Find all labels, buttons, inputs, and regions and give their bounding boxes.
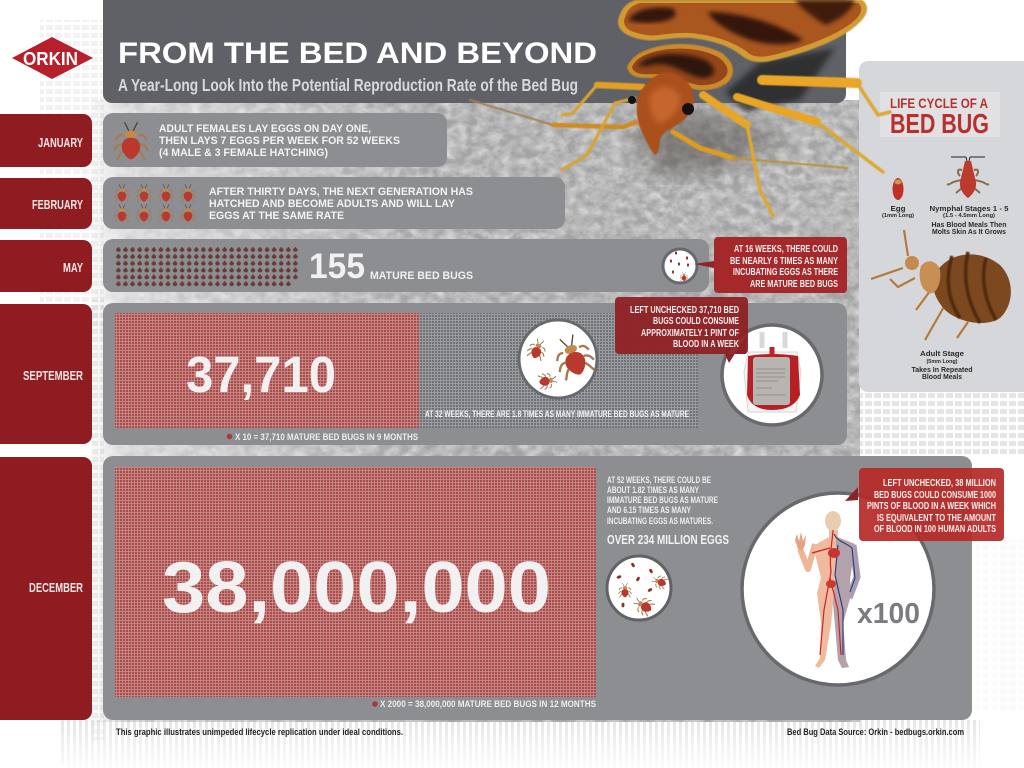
- text block: 52 weeks: IMMATURE BED BUGS AS MATURE: [607, 495, 718, 506]
- human figure: [795, 511, 857, 668]
- bug legs: [470, 80, 890, 216]
- callout: 37,710 blood: LEFT UNCHECKED 37,710 BED: [630, 305, 739, 316]
- title: FROM THE BED AND BEYOND: [118, 37, 597, 70]
- callout: 16 weeks: ARE MATURE BED BUGS: [750, 279, 838, 290]
- panel: February: HATCHED AND BECOME ADULTS AND WILL LAY: [209, 198, 456, 210]
- icon: eggs circle: [607, 556, 671, 620]
- callout: 37,710 blood: [615, 297, 748, 363]
- panel: February: [103, 177, 565, 229]
- callout: 38 million blood: [845, 468, 1004, 541]
- month tab: December: [0, 457, 92, 720]
- chart: immature bed bugs grid: [419, 313, 698, 428]
- callout: 37,710 blood: APPROXIMATELY 1 PINT OF: [641, 328, 739, 339]
- nymph label: Nymphal Stages 1 - 5: [930, 204, 1008, 213]
- icon: human circulatory system circle: x100: [857, 598, 920, 630]
- panel: September: [103, 303, 847, 445]
- header panel: [103, 0, 846, 103]
- month tab: February: FEBRUARY: [32, 197, 83, 212]
- month tab: February: [0, 178, 92, 229]
- footer note: This graphic illustrates unimpeded lifecycle replication under ideal conditions.: [116, 727, 403, 738]
- bug abdomen: [618, 0, 867, 62]
- icon: bugs circle: [519, 320, 597, 398]
- egg label: Egg: [890, 204, 906, 213]
- text block: 52 weeks: ABOUT 1.82 TIMES AS MANY: [607, 485, 699, 496]
- adult label: Takes In Repeated: [912, 367, 972, 374]
- month tab: May: MAY: [63, 260, 83, 275]
- nymph label: Molts Skin As It Grows: [932, 229, 1006, 236]
- chart: mature bed bugs grid: [115, 313, 419, 428]
- month tab: January: JANUARY: [38, 135, 83, 150]
- callout: 16 weeks: [714, 237, 847, 293]
- adult label: Adult Stage: [920, 349, 964, 358]
- bug head: [628, 72, 694, 155]
- subtitle: A Year-Long Look Into the Potential Reproduction Rate of the Bed Bug: [118, 75, 578, 95]
- callout: 16 weeks: INCUBATING EGGS AS THERE: [733, 267, 838, 278]
- adult label: (5mm Long): [926, 359, 958, 365]
- bug thorax: [627, 44, 733, 90]
- Orkin logo: [12, 37, 93, 79]
- panel: May: [103, 239, 714, 292]
- life cycle heading: [890, 95, 989, 139]
- panel: February: AFTER THIRTY DAYS, THE NEXT GENERATION HAS: [209, 186, 473, 198]
- text block: 52 weeks: INCUBATING EGGS AS MATURES.: [607, 516, 713, 527]
- icon: eggs circle: [663, 249, 697, 283]
- panel: January: [103, 113, 447, 167]
- nymph label: [930, 204, 1008, 236]
- panel: January: (4 MALE & 3 FEMALE HATCHING): [159, 147, 328, 159]
- panel: life cycle: [859, 61, 1024, 392]
- icons: eight bed bugs: [114, 184, 196, 222]
- egg label: (1mm Long): [882, 213, 914, 219]
- icon: nymph: [947, 157, 989, 198]
- panel: May: MATURE BED BUGS: [370, 270, 473, 282]
- hero image: large bed bug: [470, 0, 890, 216]
- month tab: May: [0, 240, 92, 292]
- Orkin logo: ORKIN: [23, 49, 78, 69]
- panel: September: 37,710: [186, 346, 336, 403]
- panel: January: ADULT FEMALES LAY EGGS ON DAY ONE,: [159, 123, 371, 135]
- panel: December: 38,000,000: [162, 548, 551, 628]
- panel: December: [103, 456, 972, 720]
- month tab: September: [0, 304, 92, 444]
- month tab: January: [0, 114, 92, 167]
- nymph label: Has Blood Meals Then: [932, 222, 1006, 229]
- callout: 37,710 blood: BLOOD IN A WEEK: [673, 339, 740, 350]
- callout: 16 weeks: BE NEARLY 6 TIMES AS MANY: [730, 256, 838, 267]
- month tab: September: SEPTEMBER: [23, 368, 83, 383]
- callout: 37,710 blood: BUGS COULD CONSUME: [653, 316, 739, 327]
- adult label: [912, 349, 972, 381]
- callout: 16 weeks: AT 16 WEEKS, THERE COULD: [734, 244, 838, 255]
- life cycle heading: BED BUG: [890, 108, 989, 139]
- legend: X 10 = 37,710 MATURE BED BUGS IN 9 MONTHS: [235, 432, 418, 442]
- text block: 52 weeks: AND 6.15 TIMES AS MANY: [607, 505, 691, 516]
- month tab: December: DECEMBER: [29, 580, 83, 595]
- icon: adult bed bug: [871, 230, 1011, 340]
- icon: adult bed bug: [114, 122, 148, 160]
- text block: 52 weeks: AT 52 WEEKS, THERE COULD BE: [607, 475, 711, 486]
- panel: September: AT 32 WEEKS, THERE ARE 1.8 TIMES AS MANY IMMATURE BED BUGS AS MATURE: [425, 409, 689, 419]
- legend: X 2000 = 38,000,000 MATURE BED BUGS IN 12 MONTHS: [380, 699, 596, 709]
- icon: egg: [892, 178, 904, 200]
- life cycle heading: LIFE CYCLE OF A: [890, 95, 988, 111]
- egg label: [882, 204, 914, 219]
- bug grid: 155: [115, 246, 300, 288]
- icon: human circulatory system circle: [742, 493, 934, 685]
- icon: blood bag circle: [722, 325, 822, 425]
- panel: May: 155: [309, 247, 365, 286]
- footer source: Bed Bug Data Source: Orkin - bedbugs.orkin.com: [787, 727, 964, 738]
- text block: 52 weeks: [607, 475, 718, 527]
- panel: December: OVER 234 MILLION EGGS: [607, 533, 729, 547]
- adult label: Blood Meals: [922, 374, 962, 381]
- panel: February: EGGS AT THE SAME RATE: [209, 210, 344, 222]
- chart: mature bed bugs grid: [115, 467, 596, 697]
- panel: January: THEN LAYS 7 EGGS PER WEEK FOR 52 WEEKS: [159, 135, 400, 147]
- nymph label: (1.5 - 4.5mm Long): [943, 213, 995, 219]
